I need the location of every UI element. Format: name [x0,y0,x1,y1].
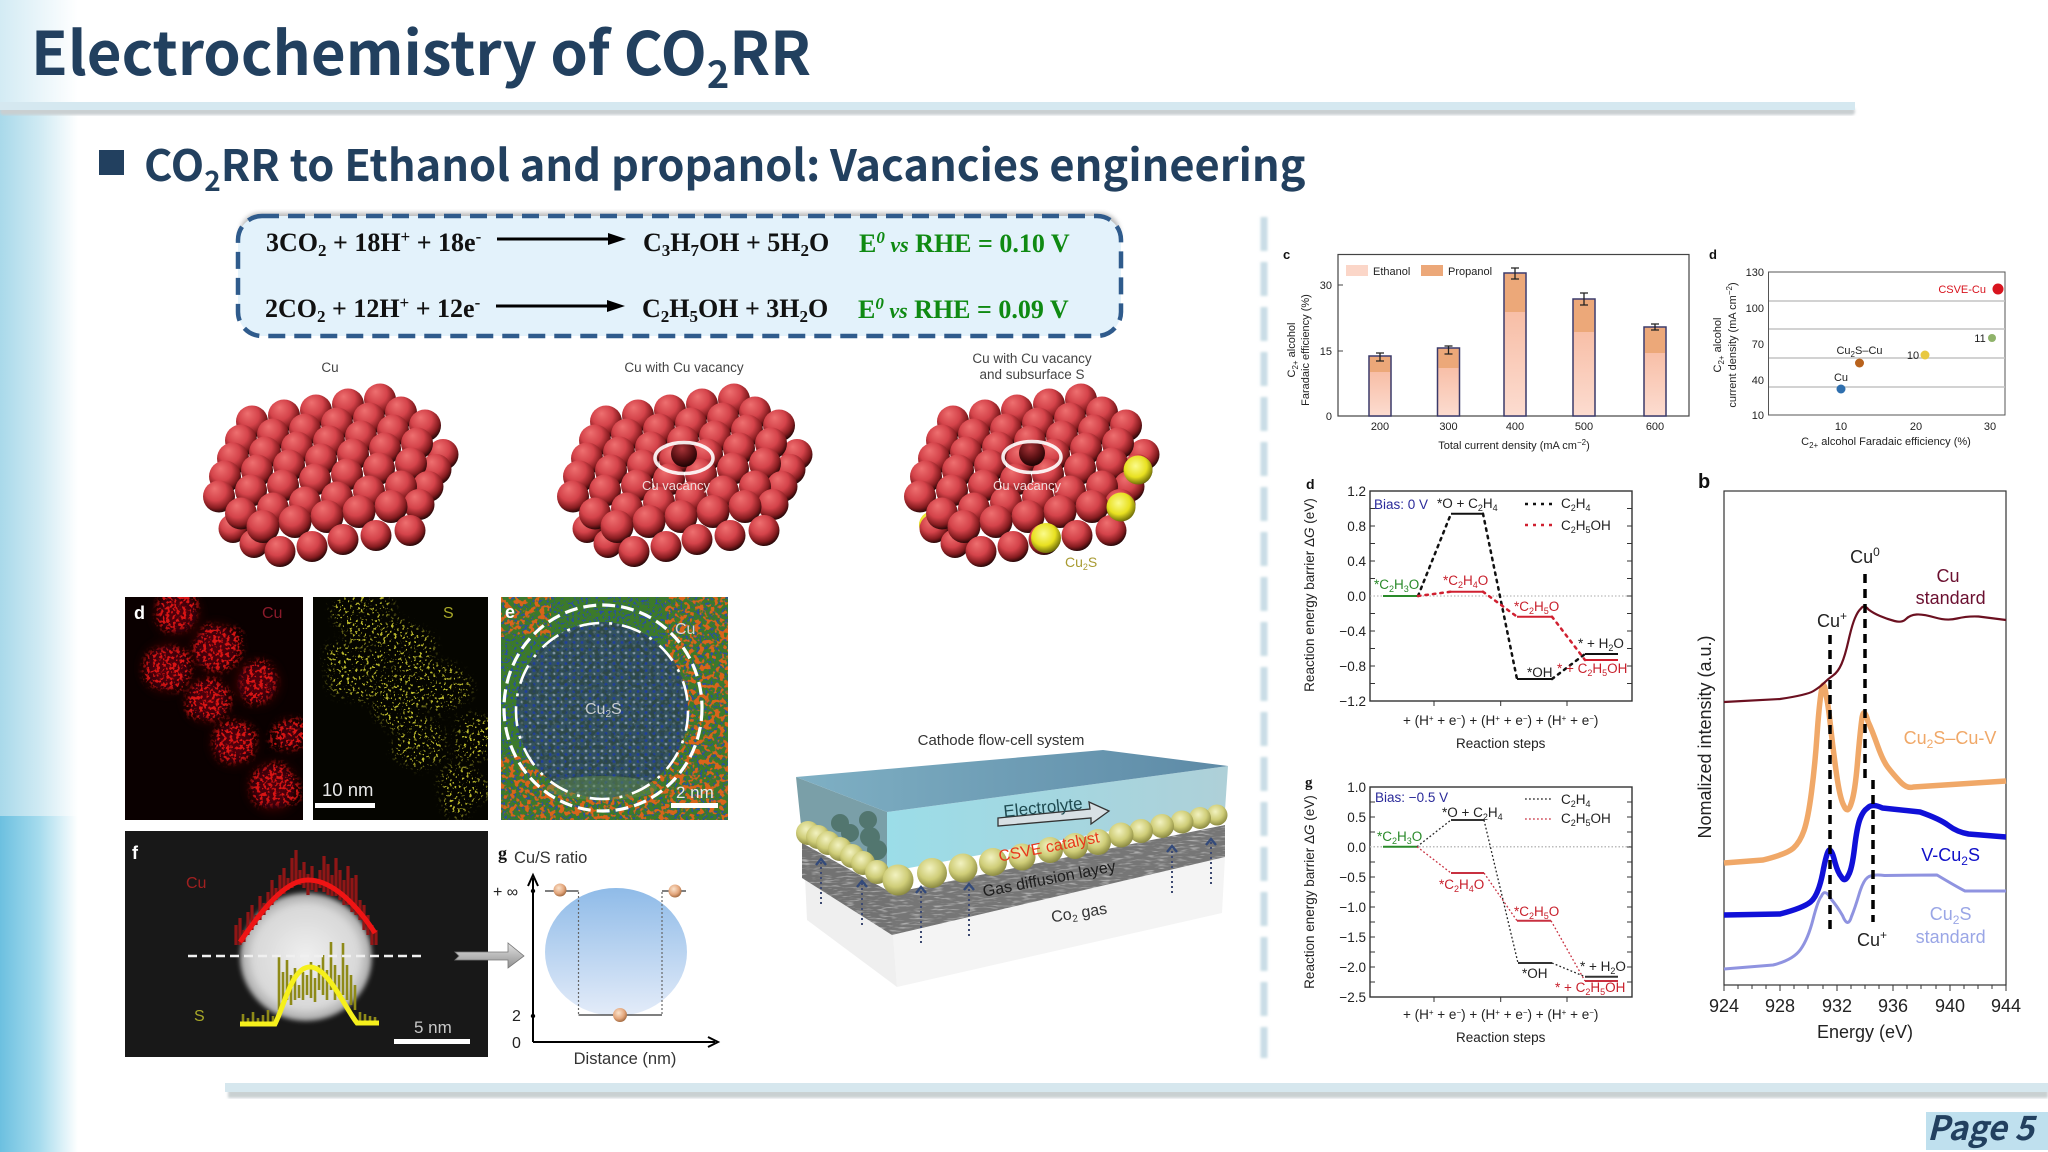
scatter chart: current density vs Faradaic efficiency: 70 [1752,339,1764,351]
energy diagram: -0.5 V bias: + [1429,1008,1434,1017]
energy diagram: 0 V bias: O [1613,636,1624,651]
energy diagram: 0 V bias: H [1576,518,1586,533]
XANES spectra chart: 0 [1873,545,1880,559]
energy diagram: 0 V bias: *C [1374,577,1389,592]
equation box [238,213,1121,336]
EDS map: S: S [443,605,454,622]
equation: propanol: RHE = 0.10 V [909,229,1070,258]
energy diagram: -0.5 V bias: g [1305,775,1313,791]
equation: ethanol [265,293,1069,326]
bar chart: C2+ alcohol Faradaic efficiency: 0 [1326,411,1332,423]
energy diagram: -0.5 V bias: OH [1605,980,1625,995]
equation: propanol: OH + 5H [699,228,801,257]
energy diagram: -0.5 V bias: 5 [1544,911,1549,921]
energy diagram: 0 V bias: + e [1566,713,1589,728]
energy diagram: -0.5 V bias: 2 [1454,884,1459,894]
bar chart: C2+ alcohol Faradaic efficiency: 300 [1439,421,1458,433]
page number: Page 5 [1927,1101,2037,1150]
bar chart: C2+ alcohol Faradaic efficiency [1283,247,1689,452]
XANES spectra chart: Cu [1930,904,1953,924]
energy diagram: 0 V bias: H [1483,496,1493,511]
energy diagram: -0.5 V bias: Bias: −0.5 V [1375,790,1448,805]
flow-cell schematic: CSVE catalyst [997,829,1101,866]
energy diagram: -0.5 V bias: OH [1591,811,1611,826]
subtitle: 2 [204,160,221,200]
energy diagram: 0 V bias: H [1463,573,1473,588]
energy diagram: 0 V bias: + e [1434,713,1456,728]
HRTEM panel: Cu [585,701,605,718]
energy diagram: -0.5 V bias: ) [1594,1007,1598,1022]
scatter chart: current density vs Faradaic efficiency: CSVE-Cu [1938,284,1986,296]
scatter chart: current density vs Faradaic efficiency: alcohol Faradaic efficiency (%) [1818,436,1971,448]
energy diagram: -0.5 V bias: 2 [1571,799,1576,809]
flow-cell schematic: 2 [1072,913,1079,925]
scatter chart: current density vs Faradaic efficiency [1709,247,2005,450]
energy diagram: 0 V bias: d [1306,476,1315,492]
Cu/S ratio plot: Cu/S ratio [514,849,587,867]
energy diagram: -0.5 V bias: H [1590,980,1600,995]
energy diagram: 0 V bias: H [1534,599,1544,614]
Cu with vacancy cluster: Cu vacancy [642,478,710,493]
subtitle: CO [144,132,204,194]
equation: ethanol: vs [884,298,908,323]
scatter chart: current density vs Faradaic efficiency: 20 [1910,421,1922,433]
XANES spectra chart: standard [1916,927,1986,947]
scatter chart: current density vs Faradaic efficiency: Cu [1836,345,1851,357]
energy diagram: 0 V bias: *O + C [1437,496,1478,511]
energy diagram: -0.5 V bias: Reaction steps [1456,1030,1546,1045]
energy diagram: 0 V bias: 5 [1586,525,1591,535]
bar chart: C2+ alcohol Faradaic efficiency: −2 [1577,438,1587,447]
equation: propanol [266,227,1070,260]
energy diagram: -0.5 V bias: *C [1514,904,1529,919]
scatter chart: current density vs Faradaic efficiency: S–Cu [1855,345,1883,357]
XANES spectra chart: 928 [1765,996,1795,1016]
XANES spectra chart: S [1959,904,1971,924]
flow-cell schematic: Gas diffusion layey [981,858,1117,901]
scatter chart: current density vs Faradaic efficiency: current density (mA cm [1727,295,1739,408]
XANES spectra chart: + [1880,928,1887,942]
energy diagram: 0 V bias: * + H [1578,636,1608,651]
XANES spectra chart: Cu [1936,566,1960,586]
HRTEM panel: 2 nm [676,783,714,802]
XANES spectra chart: 2 [1927,737,1934,751]
scatter chart: current density vs Faradaic efficiency: 100 [1746,303,1764,315]
energy diagram: 0 V bias: 0.4 [1347,554,1366,569]
energy diagram: -0.5 V bias: + e [1434,1007,1456,1022]
subtitle bullet [99,150,124,175]
scatter chart: current density vs Faradaic efficiency: 10 [1907,350,1919,362]
energy diagram: 0 V bias: *OH [1527,665,1553,680]
energy diagram: -0.5 V bias: O [1474,877,1484,892]
line scan panel: S [194,1008,205,1025]
bar chart: C2+ alcohol Faradaic efficiency: c [1283,247,1290,262]
equation: propanol: E [859,229,876,258]
arrow: line scan to ratio plot [455,943,524,968]
energy diagram: 0 V bias: 4 [1493,503,1498,513]
bar chart: C2+ alcohol Faradaic efficiency: ) [1586,440,1590,452]
energy diagram: 0 V bias: 5 [1544,606,1549,616]
equation: ethanol: 2CO [265,294,317,323]
equation: propanol: - [476,227,482,246]
energy diagram: 0 V bias: Bias: 0 V [1374,497,1428,512]
energy diagram: 0 V bias: + [1429,714,1434,723]
flow-cell schematic: Electrolyte [1003,794,1084,821]
energy diagram: -0.5 V bias: + e [1566,1007,1589,1022]
HRTEM panel: 2 [605,709,611,720]
line scan panel: f [132,843,139,863]
EDS map: Cu [125,588,308,820]
bar chart: C2+ alcohol Faradaic efficiency: 200 [1371,421,1389,433]
energy diagram: -0.5 V bias: −1.5 [1339,930,1366,945]
bar chart: C2+ alcohol Faradaic efficiency: Total current density (mA cm [1438,440,1577,452]
equation: ethanol: RHE = 0.09 V [908,295,1069,324]
energy diagram: 0 V bias: Reaction energy barrier ΔG (eV) [1302,498,1317,692]
scatter chart: current density vs Faradaic efficiency: d [1709,247,1717,262]
flow-cell schematic: gas [1076,901,1108,922]
equation: propanol: 3CO [266,228,318,257]
energy diagram: -0.5 V bias: ) + (H [1528,1007,1562,1022]
Cu with vacancy and subsurface S cluster: and subsurface S [979,367,1085,382]
bar chart: C2+ alcohol Faradaic efficiency: alcohol [1286,322,1298,360]
energy diagram: 0 V bias: 4 [1473,580,1478,590]
energy diagram: 0 V bias: 2 [1458,580,1463,590]
energy diagram: -0.5 V bias: Reaction energy barrier ΔG (eV) [1302,795,1317,989]
energy diagram: -0.5 V bias: C [1561,811,1571,826]
XANES spectra chart: 936 [1878,996,1908,1016]
energy diagram: -0.5 V bias: −2.0 [1339,960,1366,975]
energy diagram: -0.5 V bias: 2 [1610,966,1615,976]
energy diagram: -0.5 V bias: −0.5 [1339,870,1366,885]
title: 2 [707,44,729,99]
Cu with vacancy and subsurface S cluster [904,351,1160,572]
bar chart: C2+ alcohol Faradaic efficiency: C [1286,370,1298,378]
energy diagram: 0 V bias: + (H [1403,713,1429,728]
EDS map: Cu: d [134,603,145,623]
equation: ethanol: + [400,293,409,312]
XANES spectra chart: b [1698,471,1710,493]
XANES spectra chart: 944 [1991,996,2021,1016]
energy diagram: 0 V bias: C [1561,496,1571,511]
XANES spectra chart: 2 [1961,854,1968,868]
equation: propanol: H [670,228,691,257]
scatter chart: current density vs Faradaic efficiency: 130 [1746,267,1764,279]
energy diagram: -0.5 V bias: H [1534,904,1544,919]
Cu with vacancy cluster: Cu with Cu vacancy [624,360,744,375]
energy diagram: -0.5 V bias: O [1412,829,1422,844]
equation: propanol: O [809,228,829,257]
energy diagram: -0.5 V bias: *C [1439,877,1454,892]
XANES spectra chart: Nomalized intensity (a.u.) [1695,635,1715,839]
energy diagram: -0.5 V bias [1302,775,1632,1045]
energy diagram: -0.5 V bias: 5 [1586,818,1591,828]
subtitle: RR to Ethanol and propanol: Vacancies engineering [221,132,1306,194]
energy diagram: -0.5 V bias: ) + (H [1461,1007,1495,1022]
energy diagram: 0 V bias: ) [1594,713,1598,728]
XANES spectra chart: 2 [1953,913,1960,927]
energy diagram: -0.5 V bias: H [1397,829,1407,844]
energy diagram: 0 V bias: OH [1607,661,1627,676]
energy diagram: -0.5 V bias: + [1495,1008,1500,1017]
bar chart: C2+ alcohol Faradaic efficiency: 400 [1506,421,1524,433]
energy diagram: 0 V bias: 2 [1587,668,1592,678]
XANES spectra chart: + [1840,609,1847,623]
energy diagram: 0 V bias: ) + (H [1461,713,1495,728]
XANES spectra chart: Cu [1850,547,1873,567]
energy diagram: 0 V bias: O [1409,577,1419,592]
energy diagram: 0 V bias: 3 [1404,584,1409,594]
energy diagram: 0 V bias: − [1589,714,1594,723]
equation: ethanol: + 12e [409,294,475,323]
XANES spectra chart: V-Cu [1921,845,1961,865]
footer rule [225,1083,2048,1098]
HRTEM panel: Cu [675,621,695,638]
energy diagram: 0 V bias: + [1495,714,1500,723]
equation: ethanol: - [475,293,481,312]
energy diagram: 0 V bias: *C [1443,573,1458,588]
equation: ethanol: 5 [690,307,698,326]
bar chart: C2+ alcohol Faradaic efficiency: 15 [1320,346,1332,358]
equation: propanol: 2 [801,241,809,260]
Cu/S ratio plot: Distance (nm) [574,1050,676,1068]
XANES spectra chart: Cu [1817,611,1840,631]
Cu/S ratio plot: 2 [512,1008,521,1025]
XANES spectra chart: Energy (eV) [1817,1022,1913,1042]
scatter chart: current density vs Faradaic efficiency: 2+ [1717,355,1726,365]
bar chart: C2+ alcohol Faradaic efficiency: 2+ [1291,360,1300,370]
energy diagram: 0 V bias [1302,476,1632,751]
header rule [0,102,1855,115]
equation: ethanol: + 12H [326,294,400,323]
energy diagram: -0.5 V bias: 2 [1571,818,1576,828]
energy diagram: -0.5 V bias: 4 [1498,812,1503,822]
energy diagram: 0 V bias: − [1523,714,1528,723]
energy diagram: -0.5 V bias: H [1576,792,1586,807]
energy diagram: -0.5 V bias: 3 [1407,836,1412,846]
Cu with vacancy cluster [557,360,812,567]
equation: ethanol: 2 [661,307,669,326]
bar chart: C2+ alcohol Faradaic efficiency: Faradaic efficiency (%) [1300,294,1312,406]
HRTEM panel: e [505,602,515,622]
energy diagram: 0 V bias: H [1576,496,1586,511]
energy diagram: -0.5 V bias: 1.0 [1347,780,1366,795]
flow-cell schematic [796,732,1228,987]
equation: ethanol: E [858,295,875,324]
EDS map: S [313,584,499,820]
energy diagram: 0 V bias: 2 [1389,584,1394,594]
energy diagram: 0 V bias: 2 [1529,606,1534,616]
EDS map: Cu: Cu [262,605,282,622]
energy diagram: 0 V bias: 0.0 [1347,589,1366,604]
energy diagram: 0 V bias: −0.8 [1339,659,1366,674]
energy diagram: 0 V bias: O [1549,599,1559,614]
scatter chart: current density vs Faradaic efficiency: C [1712,365,1724,372]
scatter chart: current density vs Faradaic efficiency: Cu [1834,372,1848,384]
flow-cell schematic: Co [1050,906,1073,926]
energy diagram: 0 V bias: + [1562,714,1567,723]
XANES spectra chart: Cu [1904,728,1927,748]
energy diagram: -0.5 V bias: 0.5 [1347,810,1366,825]
Cu/S ratio plot: 0 [512,1035,521,1052]
energy diagram: -0.5 V bias: * + C [1555,980,1585,995]
bar chart: C2+ alcohol Faradaic efficiency: 500 [1575,421,1593,433]
XANES spectra chart [1695,471,2021,1042]
energy diagram: -0.5 V bias: −1.0 [1339,900,1366,915]
title: Electrochemistry of CO [31,6,707,93]
energy diagram: -0.5 V bias: + e [1500,1007,1523,1022]
bar chart: C2+ alcohol Faradaic efficiency: 30 [1320,280,1332,292]
Cu with vacancy and subsurface S cluster: Cu with Cu vacancy [972,351,1092,366]
energy diagram: 0 V bias: 2 [1478,503,1483,513]
equation: propanol: 3 [662,241,670,260]
scatter chart: current density vs Faradaic efficiency: 30 [1984,421,1996,433]
title: RR [729,6,811,93]
equation: ethanol: H [669,294,690,323]
energy diagram: -0.5 V bias: 2 [1529,911,1534,921]
equation: ethanol: 2 [317,307,326,326]
line scan panel: 5 nm [414,1018,452,1037]
equation: propanol: vs [885,232,909,257]
energy diagram: 0 V bias: H [1592,661,1602,676]
energy diagram: -0.5 V bias: + [1562,1008,1567,1017]
Cu with vacancy and subsurface S cluster: 2 [1083,562,1088,572]
bar chart: C2+ alcohol Faradaic efficiency: Ethanol [1373,266,1410,278]
XANES spectra chart: 924 [1709,996,1739,1016]
equation: ethanol: C [642,294,661,323]
scatter chart: current density vs Faradaic efficiency: 2 [1851,350,1856,359]
energy diagram: -0.5 V bias: O [1615,959,1626,974]
XANES spectra chart: S–Cu-V [1933,728,1996,748]
energy diagram: 0 V bias: 1.2 [1347,484,1366,499]
XANES spectra chart: Cu [1857,930,1880,950]
energy diagram: -0.5 V bias: C [1561,792,1571,807]
energy diagram: -0.5 V bias: 2 [1483,812,1488,822]
Cu cluster: Cu [321,360,339,375]
energy diagram: 0 V bias: OH [1591,518,1611,533]
energy diagram: -0.5 V bias: *O + C [1442,805,1483,820]
equation: propanol: + 18H [326,228,401,257]
energy diagram: 0 V bias: − [1456,714,1461,723]
scatter chart: current density vs Faradaic efficiency: 2+ [1809,441,1819,450]
equation: ethanol: 2 [800,307,808,326]
energy diagram: -0.5 V bias: * + H [1580,959,1610,974]
XANES spectra chart: S [1968,845,1980,865]
energy diagram: -0.5 V bias: H [1488,805,1498,820]
energy diagram: 0 V bias: + e [1500,713,1523,728]
energy diagram: -0.5 V bias: *OH [1522,966,1548,981]
equation: propanol: + [401,227,410,246]
equation: propanol: 2 [318,241,326,260]
scatter chart: current density vs Faradaic efficiency: ) [1727,282,1739,286]
energy diagram: 0 V bias: −0.4 [1339,624,1366,639]
bar chart: C2+ alcohol Faradaic efficiency: 600 [1646,421,1664,433]
energy diagram: -0.5 V bias: + (H [1403,1007,1429,1022]
Cu cluster [203,360,458,567]
energy diagram: 0 V bias: *C [1514,599,1529,614]
energy diagram: -0.5 V bias: 4 [1469,884,1474,894]
energy diagram: -0.5 V bias: 5 [1600,987,1605,997]
energy diagram: -0.5 V bias: −2.5 [1339,990,1366,1005]
energy diagram: -0.5 V bias: *C [1377,829,1392,844]
energy diagram: 0 V bias: Reaction steps [1456,736,1546,751]
energy diagram: -0.5 V bias: 0.0 [1347,840,1366,855]
scatter chart: current density vs Faradaic efficiency: 11 [1974,333,1986,345]
equation: ethanol: O [808,294,828,323]
energy diagram: 0 V bias: 5 [1602,668,1607,678]
Cu with vacancy and subsurface S cluster: Cu [1065,554,1083,570]
XANES spectra chart: standard [1916,588,1986,608]
energy diagram: -0.5 V bias: 2 [1392,836,1397,846]
Cu with vacancy and subsurface S cluster: Cu vacancy [993,478,1061,493]
energy diagram: 0 V bias: O [1478,573,1488,588]
energy diagram: 0 V bias: 2 [1608,643,1613,653]
XANES spectra chart: 940 [1935,996,1965,1016]
energy diagram: 0 V bias: ) + (H [1528,713,1562,728]
line scan panel [125,831,488,1057]
XANES spectra chart: 932 [1822,996,1852,1016]
bar chart: C2+ alcohol Faradaic efficiency: Propanol [1448,266,1492,278]
Cu with vacancy and subsurface S cluster: S [1088,554,1097,570]
energy diagram: 0 V bias: 0.8 [1347,519,1366,534]
scatter chart: current density vs Faradaic efficiency: C [1801,436,1809,448]
Cu/S ratio plot [493,843,718,1068]
energy diagram: 0 V bias: 4 [1586,503,1591,513]
scatter chart: current density vs Faradaic efficiency: alcohol [1712,318,1724,355]
energy diagram: -0.5 V bias: − [1456,1008,1461,1017]
energy diagram: 0 V bias: −1.2 [1339,694,1366,709]
scatter chart: current density vs Faradaic efficiency: 10 [1752,410,1764,422]
energy diagram: -0.5 V bias: − [1589,1008,1594,1017]
energy diagram: 0 V bias: 2 [1571,503,1576,513]
equation: propanol: 0 [876,228,885,247]
Cu/S ratio plot: + ∞ [493,884,518,901]
equation: propanol: 7 [691,241,700,260]
scatter chart: current density vs Faradaic efficiency: 10 [1835,421,1847,433]
EDS map: S: 10 nm [322,779,373,800]
Cu/S ratio plot: g [498,843,507,863]
flow-cell schematic: Cathode flow-cell system [918,732,1084,749]
scatter chart: current density vs Faradaic efficiency: −2 [1725,285,1734,295]
equation: propanol: + 18e [410,228,476,257]
energy diagram: -0.5 V bias: 2 [1585,987,1590,997]
energy diagram: -0.5 V bias: 4 [1586,799,1591,809]
equation: ethanol: 0 [875,294,884,313]
energy diagram: -0.5 V bias: O [1549,904,1559,919]
energy diagram: 0 V bias: C [1561,518,1571,533]
energy diagram: -0.5 V bias: H [1576,811,1586,826]
equation: ethanol: OH + 3H [698,294,800,323]
energy diagram: -0.5 V bias: − [1523,1008,1528,1017]
HRTEM panel [501,597,728,820]
energy diagram: 0 V bias: 2 [1571,525,1576,535]
HRTEM panel: S [611,701,622,718]
energy diagram: 0 V bias: * + C [1557,661,1587,676]
scatter chart: current density vs Faradaic efficiency: 40 [1752,375,1764,387]
equation: propanol: C [643,228,662,257]
energy diagram: -0.5 V bias: H [1459,877,1469,892]
line scan panel: Cu [186,875,206,892]
energy diagram: 0 V bias: H [1394,577,1404,592]
